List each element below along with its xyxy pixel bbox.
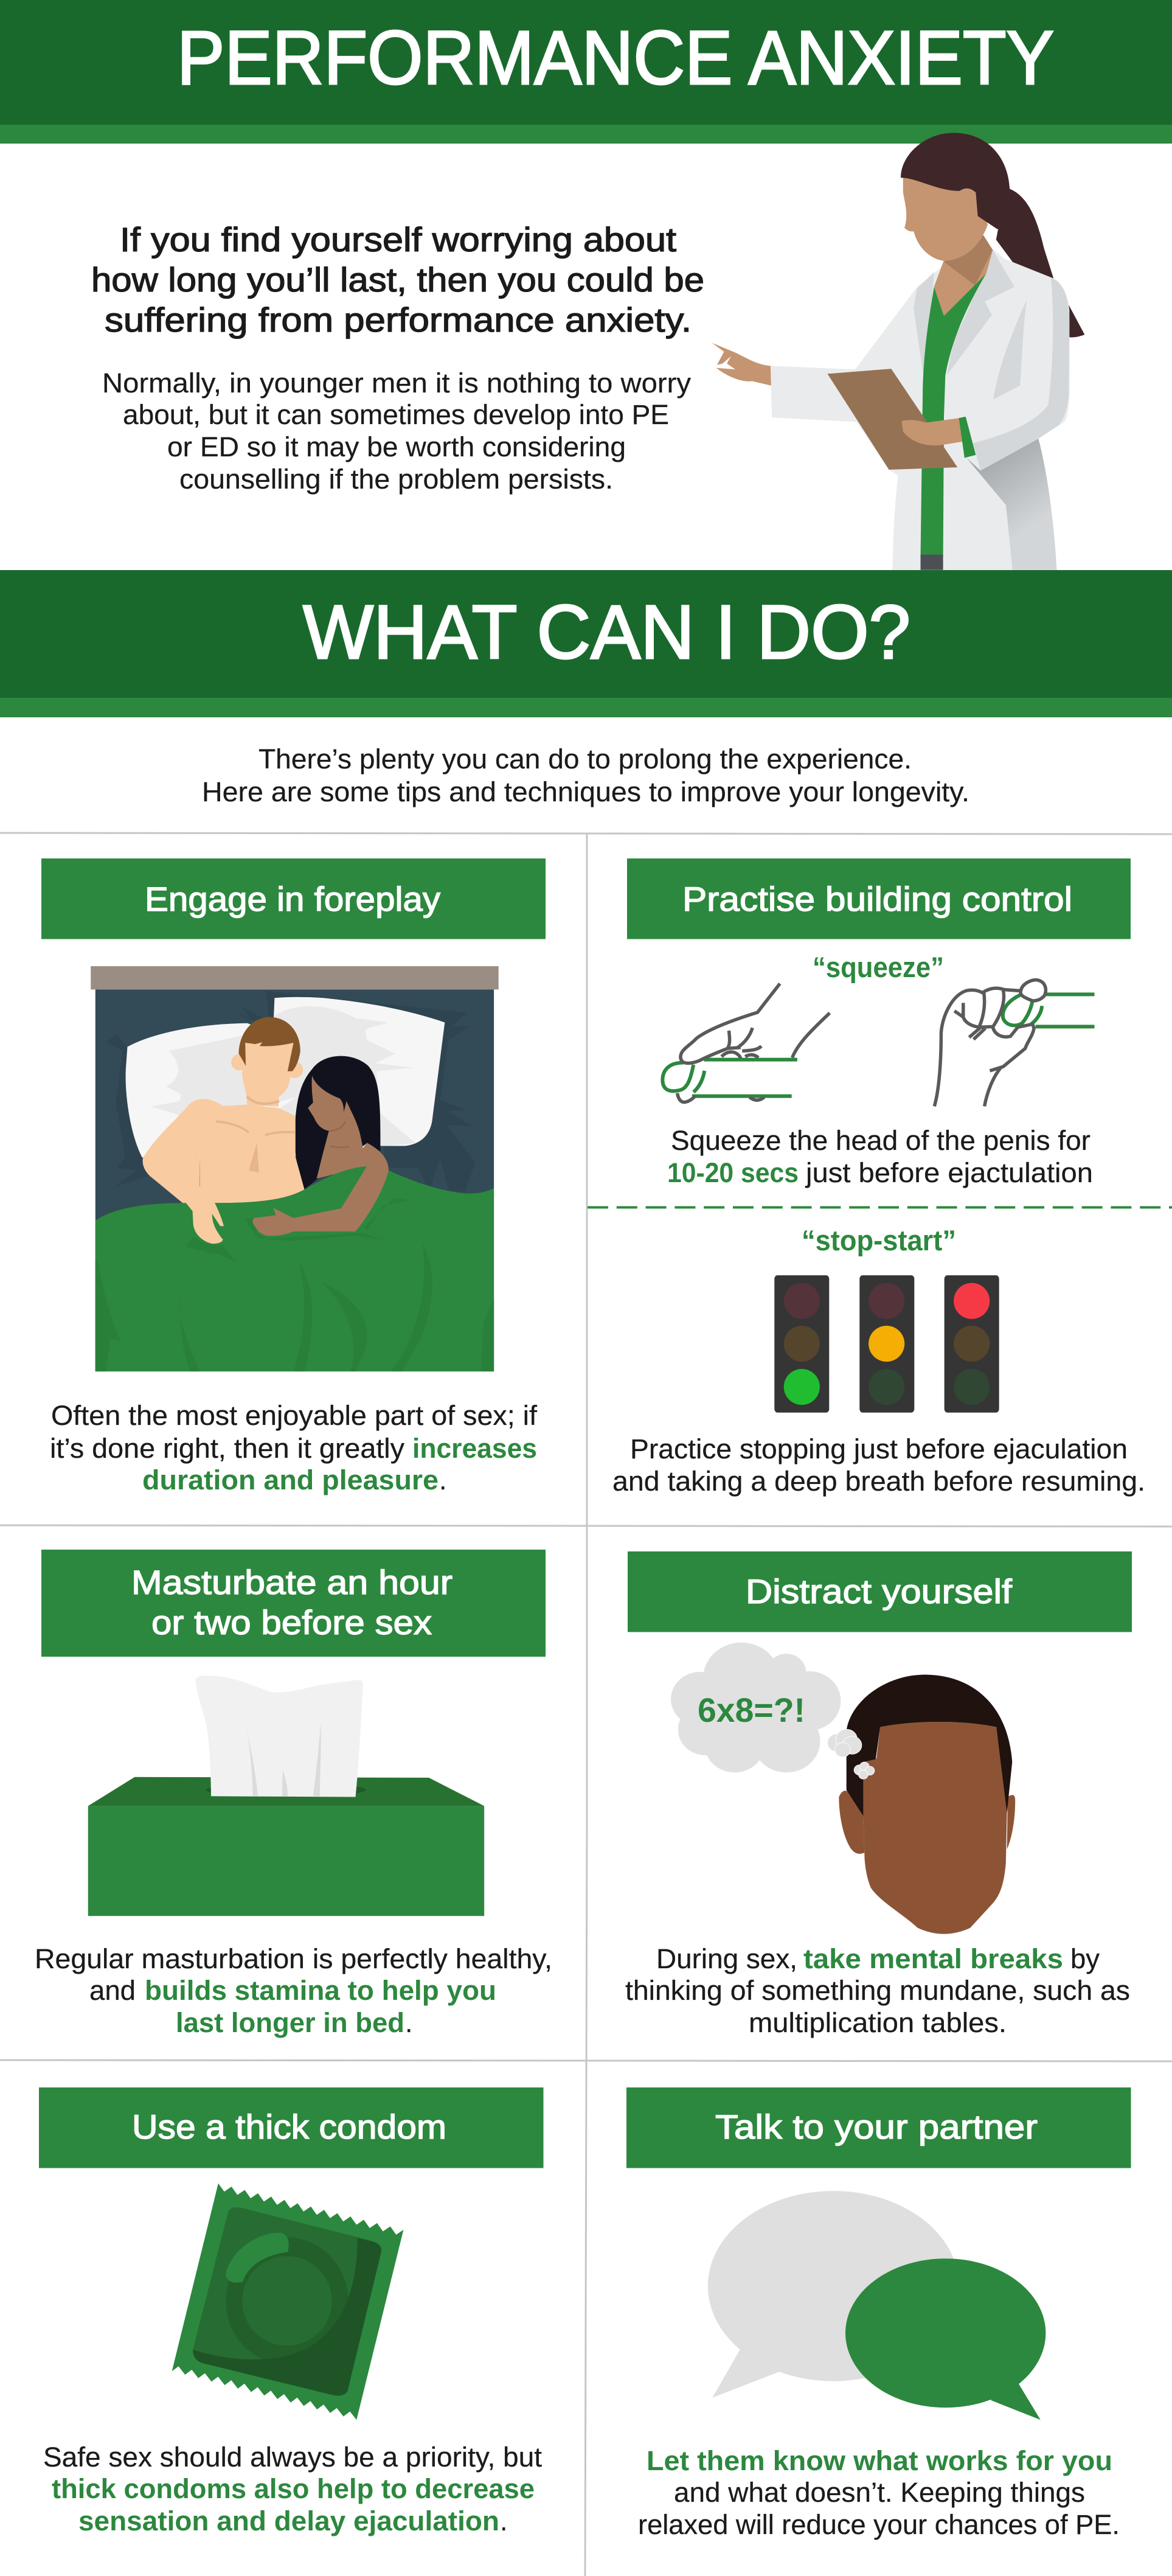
text block: foreplay description: [50, 1400, 538, 1495]
heading: WHAT CAN I DO?: [303, 590, 910, 675]
illustration: head with thought bubble: [671, 1643, 1015, 1934]
head: [839, 1675, 1015, 1934]
label: squeeze: “squeeze”: [813, 951, 944, 983]
text block: foreplay description: duration and pleasure: [142, 1464, 439, 1495]
thought bubble: [671, 1643, 874, 1779]
duvet: [95, 1166, 494, 1371]
text block: performance anxiety body: Normally, in younger men it is nothing to worry: [102, 367, 692, 399]
heading bar: talk to your partner: [626, 2087, 1131, 2168]
text block: masturbate description: builds stamina to help you: [145, 1975, 496, 2006]
heading bar: engage in foreplay: [41, 858, 546, 939]
illustration: tissue box: [88, 1676, 484, 1916]
man's hand: [179, 1189, 224, 1244]
text block: stop-start description: and taking a deep breath before resuming.: [612, 1466, 1145, 1497]
text block: condom description: sensation and delay ejaculation: [78, 2505, 499, 2536]
banner: what can I do: [0, 570, 1172, 717]
text block: distract description: [625, 1943, 1130, 2038]
illustration: doctor with clipboard: [712, 133, 1084, 570]
heading bar: distract yourself: [628, 1551, 1132, 1632]
text block: performance anxiety body: or ED so it may be worth considering: [167, 431, 626, 462]
text block: intro: There’s plenty you can do to prolong the experience.: [258, 743, 912, 775]
text block: squeeze description: [667, 1125, 1093, 1188]
man's torso and arm: [143, 1099, 305, 1211]
text block: foreplay description: increases: [412, 1433, 537, 1464]
text block: performance anxiety body: about, but it can sometimes develop into PE: [123, 399, 669, 430]
text block: distract description: multiplication tables.: [749, 2007, 1007, 2038]
text block: distract description: During sex,: [656, 1943, 797, 1974]
heading bar: thick condom: [39, 2087, 544, 2168]
man's head: [231, 1017, 303, 1107]
text block: partner description: relaxed will reduce your chances of PE.: [638, 2509, 1120, 2540]
heading bar: masturbate: Masturbate an hour: [131, 1563, 453, 1601]
text block: masturbate description: Regular masturbation is perfectly healthy,: [35, 1943, 552, 1974]
text block: distract description: thinking of something mundane, such as: [625, 1975, 1130, 2006]
text block: masturbate description: .: [405, 2007, 413, 2038]
text block: squeeze description: Squeeze the head of the penis for: [671, 1125, 1091, 1156]
text block: partner description: [638, 2445, 1120, 2540]
panel: masturbate: [35, 1550, 552, 2038]
text block: stop-start description: Practice stopping just before ejaculation: [630, 1433, 1128, 1464]
heading bar: thick condom: Use a thick condom: [132, 2108, 446, 2146]
icon: squeeze from the front: [934, 980, 1094, 1106]
heading bar: talk to your partner: Talk to your partner: [715, 2108, 1038, 2146]
text block: condom description: thick condoms also help to decrease: [52, 2473, 535, 2504]
thought text: 6x8=?!: [698, 1691, 805, 1729]
text block: foreplay description: Often the most enjoyable part of sex; if: [51, 1400, 538, 1431]
text block: partner description: and what doesn’t. Keeping things: [674, 2477, 1085, 2508]
label: stop-start: “stop-start”: [802, 1224, 956, 1256]
woman's face and torso: [308, 1075, 367, 1178]
panel: thick condom: [39, 2087, 544, 2536]
panel: talk to your partner: [626, 2087, 1131, 2540]
text block: performance anxiety lead: [91, 220, 704, 339]
text block: condom description: .: [500, 2505, 508, 2536]
heading bar: distract yourself: Distract yourself: [746, 1572, 1012, 1610]
text block: squeeze description: 10-20 secs: [667, 1157, 799, 1188]
heading bar: practise building control: [627, 858, 1131, 939]
text block: intro: [202, 743, 969, 807]
icon: traffic lights: [774, 1275, 999, 1413]
text block: foreplay description: it’s done right, then it greatly: [50, 1433, 405, 1464]
illustration: speech bubbles: [708, 2191, 1045, 2420]
illustration: couple in bed: [91, 966, 499, 1371]
title: PERFORMANCE ANXIETY: [177, 16, 1054, 100]
text block: distract description: take mental breaks: [803, 1943, 1063, 1974]
heading bar: masturbate: [41, 1550, 546, 1657]
panel: engage in foreplay: [41, 858, 546, 1495]
panel: distract yourself: [625, 1551, 1132, 2038]
text block: condom description: Safe sex should always be a priority, but: [43, 2442, 543, 2473]
text block: distract description: by: [1070, 1943, 1100, 1974]
text block: intro: Here are some tips and techniques to improve your longevity.: [202, 776, 969, 807]
illustration: condom packet: [172, 2184, 403, 2420]
text block: stop-start description: [612, 1433, 1145, 1497]
heading bar: engage in foreplay: Engage in foreplay: [145, 880, 440, 918]
text block: masturbate description: and: [89, 1975, 136, 2006]
grey speech bubble: [708, 2191, 959, 2398]
text block: performance anxiety body: [102, 367, 692, 495]
text block: performance anxiety lead: suffering from performance anxiety.: [105, 301, 692, 339]
text block: performance anxiety lead: how long you’ll last, then you could be: [91, 260, 704, 299]
heading bar: practise building control: Practise building control: [682, 880, 1072, 918]
text block: performance anxiety lead: If you find yourself worrying about: [120, 220, 676, 259]
panel: practise building control: [588, 858, 1172, 1497]
text block: condom description: [43, 2442, 543, 2536]
text block: performance anxiety body: counselling if the problem persists.: [179, 464, 613, 495]
text block: squeeze description: just before ejactulation: [805, 1157, 1093, 1188]
traffic light: green: [774, 1275, 829, 1413]
text block: foreplay description: .: [439, 1464, 447, 1495]
text block: partner description: Let them know what works for you: [647, 2445, 1112, 2476]
traffic light: red: [945, 1275, 999, 1413]
green speech bubble: [845, 2258, 1045, 2420]
heading bar: masturbate: or two before sex: [151, 1603, 432, 1641]
traffic light: amber: [859, 1275, 914, 1413]
icon: squeeze from the side: [662, 984, 830, 1102]
top banner: performance anxiety: [0, 0, 1172, 144]
woman's arm: [252, 1143, 389, 1236]
woman's hair: [294, 1056, 381, 1189]
text block: masturbate description: [35, 1943, 552, 2038]
text block: masturbate description: last longer in bed: [176, 2007, 404, 2038]
